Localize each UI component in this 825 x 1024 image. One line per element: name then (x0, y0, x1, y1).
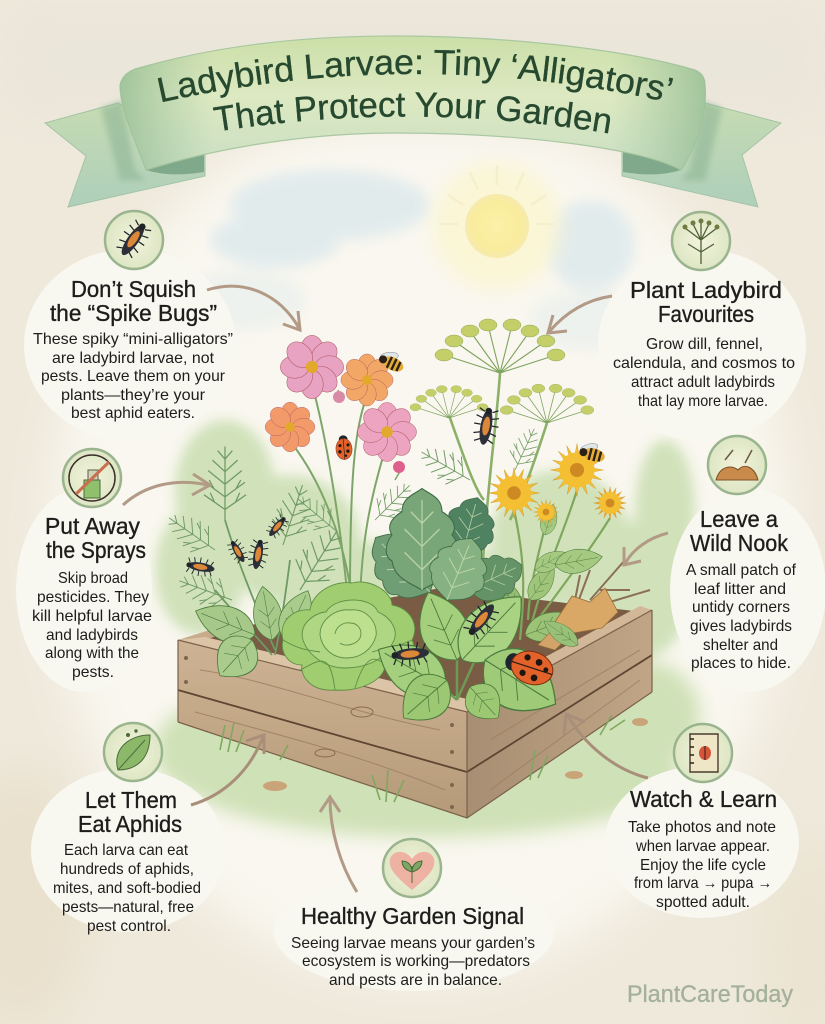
adult ladybird (501, 644, 557, 690)
body text: leaf litter and (694, 581, 786, 598)
body text: calendula, and cosmos to (613, 355, 795, 372)
plant: feathery fern left (160, 446, 354, 689)
ground petals (263, 718, 648, 791)
body text: spotted adult. (656, 894, 750, 911)
plant: cosmos flowers (265, 335, 420, 600)
larva on leaf (391, 640, 430, 668)
body text: plants—they’re your (61, 387, 206, 404)
back rim (178, 628, 228, 640)
body text: that lay more larvae. (638, 393, 768, 410)
heading: Don’t Squish (71, 276, 196, 302)
heading (45, 513, 146, 563)
arrow: Watch and Learn to bed (564, 714, 648, 778)
heading: Favourites (658, 301, 754, 327)
panel: Healthy Garden Signal (274, 873, 554, 991)
body text (33, 331, 233, 422)
heading: Healthy Garden Signal (301, 903, 524, 929)
flower: calendula large (551, 444, 603, 496)
body text: best aphid eaters. (71, 405, 195, 422)
wood knots (351, 707, 373, 717)
icon: dill sprig (672, 212, 730, 270)
icon: notebook (674, 724, 732, 782)
body text: and ladybirds (46, 627, 138, 644)
ribbon banner (44, 35, 782, 208)
body text: pest control. (87, 918, 171, 935)
body text (53, 842, 201, 935)
arrow: Sprays to fern (123, 474, 210, 505)
heading: Leave a (700, 506, 778, 532)
body text: Take photos and note (628, 819, 776, 836)
arrow: Healthy Garden to bed (320, 797, 357, 892)
grass tufts (220, 715, 625, 802)
icon: heart with sprout (383, 839, 441, 897)
body text (628, 819, 776, 911)
bee (375, 345, 409, 375)
heading (50, 276, 217, 326)
fold shadows (146, 150, 204, 174)
flower: pink cosmos (280, 335, 344, 399)
icon: compost heap (708, 436, 766, 494)
body text: along with the (45, 645, 139, 662)
arrow: Plant Ladybird to dill (548, 296, 612, 333)
larva (185, 555, 216, 579)
body text (613, 336, 795, 410)
larva (246, 538, 270, 571)
plant: lettuce (282, 582, 415, 690)
body text (686, 562, 797, 672)
larva (225, 537, 250, 566)
title (158, 49, 673, 134)
body text: pesticides. They (37, 589, 149, 606)
raised wooden bed (178, 588, 652, 818)
watermark: PlantCareToday (627, 981, 793, 1008)
main ribbon (120, 36, 705, 170)
plant: calendula (485, 438, 626, 648)
sun (433, 162, 561, 290)
bee (576, 438, 608, 464)
icon: aphid on leaf (104, 723, 162, 781)
right tail (622, 103, 781, 207)
dead leaves and twigs (538, 560, 650, 652)
right face (467, 610, 652, 818)
body text: untidy corners (692, 599, 790, 616)
body text (32, 570, 152, 681)
body text: shelter and (703, 637, 778, 654)
flower: orange cosmos (341, 354, 393, 406)
panel: Put Away the Sprays (16, 488, 152, 692)
bud (333, 391, 345, 403)
flower: calendula bud right (594, 486, 626, 520)
flower: calendula (488, 468, 540, 518)
front face (178, 640, 467, 818)
panel: Plant Ladybird Favourites (598, 249, 806, 441)
heading: the “Spike Bugs” (50, 300, 217, 326)
heading (690, 506, 788, 556)
body text: Seeing larvae means your garden’s (291, 935, 535, 952)
plant: dill umbels (410, 319, 594, 560)
larva on stem (471, 406, 502, 447)
arrow: Aphids to bed (191, 735, 264, 805)
flower: orange cosmos left (265, 402, 315, 452)
body text: Skip broad (58, 570, 128, 587)
icon: larva (105, 211, 163, 269)
larva on leaf (460, 597, 503, 642)
larva (264, 513, 291, 541)
body text: places to hide. (691, 655, 791, 672)
top rims (178, 637, 467, 712)
panel: Let Them Eat Aphids (31, 768, 225, 935)
body text: A small patch of (686, 562, 797, 579)
icon: no spray (63, 449, 121, 507)
heading (630, 277, 782, 327)
body text: Each larva can eat (64, 842, 189, 859)
flower: calendula bud (533, 499, 559, 525)
plank seams (178, 655, 652, 772)
plant: kale (354, 488, 532, 613)
body text: gives ladybirds (690, 618, 792, 635)
body text: pests. Leave them on your (41, 368, 226, 385)
body text: pests. (72, 664, 114, 681)
body text: from larva → pupa → (634, 875, 772, 892)
title: Ladybird Larvae: Tiny ‘Alligators’ (158, 49, 673, 102)
panel: Leave a Wild Nook (670, 488, 825, 692)
body text: pests—natural, free (62, 899, 194, 916)
panel: Watch and Learn (605, 766, 799, 918)
heading: Wild Nook (690, 530, 788, 556)
small ladybird (335, 435, 353, 460)
heading: the Sprays (46, 537, 146, 563)
body text: and pests are in balance. (329, 972, 502, 989)
flower: pink cosmos right (358, 403, 416, 461)
arrow: Don't Squish to flowers (207, 286, 300, 330)
soil (205, 588, 642, 702)
body text: Enjoy the life cycle (640, 857, 766, 874)
background foliage and ground wash (155, 420, 700, 837)
panel: Don't Squish (24, 249, 236, 441)
body text: hundreds of aphids, (60, 861, 194, 878)
left tail (45, 103, 205, 207)
body text: are ladybird larvae, not (52, 350, 215, 367)
body text: when larvae appear. (635, 838, 770, 855)
body text: kill helpful larvae (32, 608, 152, 625)
heading: Put Away (45, 513, 140, 539)
sky clouds (185, 169, 650, 350)
body text (291, 935, 535, 989)
title: That Protect Your Garden (212, 92, 610, 134)
heading (78, 787, 182, 837)
body text: Grow dill, fennel, (646, 336, 763, 353)
heading: Let Them (85, 787, 177, 813)
arrow: Wild Nook to twigs (624, 533, 668, 565)
heading: Plant Ladybird (630, 277, 782, 303)
body text: ecosystem is working—predators (302, 953, 530, 970)
body text: attract adult ladybirds (631, 374, 775, 391)
body text: These spiky “mini-alligators” (33, 331, 233, 348)
heading: Watch & Learn (630, 786, 777, 812)
heading: Eat Aphids (78, 811, 182, 837)
plant: front broadleaf with insects (367, 580, 571, 734)
body text: mites, and soft-bodied (53, 880, 201, 897)
